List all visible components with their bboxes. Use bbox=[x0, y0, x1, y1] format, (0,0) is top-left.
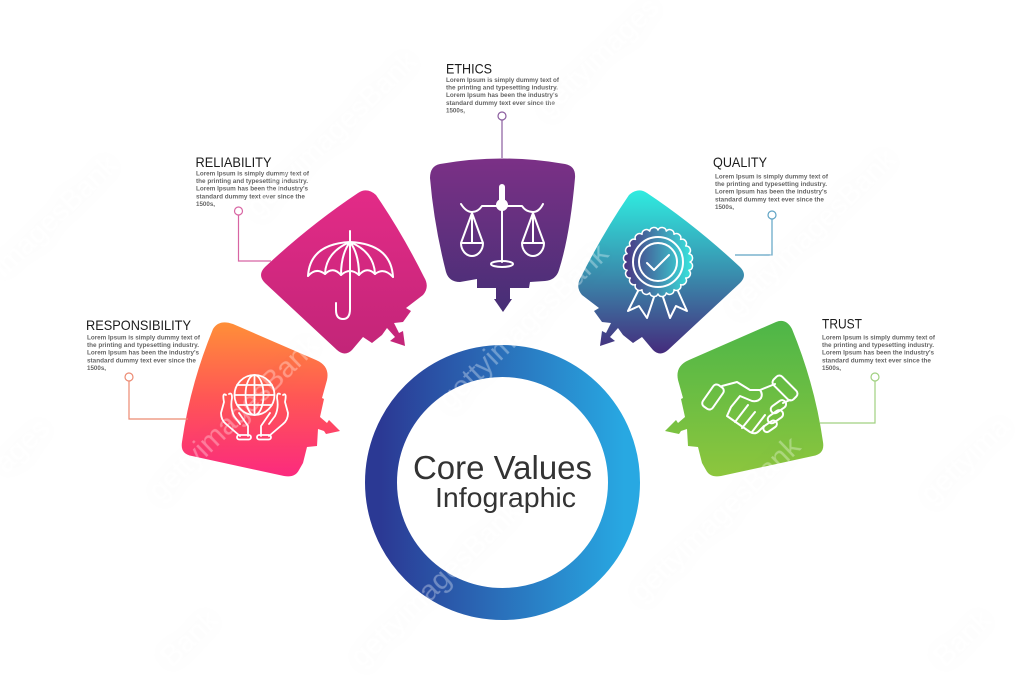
icon: balance scales bbox=[461, 186, 544, 267]
label: reliability: standard dummy text ever since the bbox=[196, 194, 305, 200]
panel: reliability bbox=[261, 190, 427, 354]
watermark text: gettyimagesBank bbox=[625, 430, 807, 608]
label: ethics: 1500s, bbox=[446, 108, 465, 114]
panel: ethics bbox=[430, 158, 575, 312]
label: trust: standard dummy text ever since the bbox=[822, 358, 931, 364]
watermark text: Bank bbox=[928, 604, 998, 673]
label: trust: 1500s, bbox=[822, 365, 841, 372]
label: quality: standard dummy text ever since the bbox=[715, 196, 824, 204]
label: ethics: Lorem Ipsum is simply dummy text of bbox=[446, 77, 560, 84]
reliability shape with arrow bbox=[261, 190, 427, 354]
watermark text: gettyimagesBank bbox=[720, 143, 902, 321]
label: trust: Lorem Ipsum is simply dummy text of bbox=[822, 334, 936, 342]
label: trust: the printing and typesetting industry. bbox=[822, 342, 934, 349]
label: responsibility: 1500s, bbox=[87, 365, 106, 372]
panel: trust bbox=[665, 321, 823, 476]
label: responsibility: the printing and typesetting industry. bbox=[87, 342, 199, 349]
trust shape with arrow bbox=[665, 321, 823, 476]
label: ethics bbox=[446, 60, 560, 114]
label: reliability: RELIABILITY bbox=[196, 154, 272, 170]
watermark text: gettyimagesBank bbox=[433, 237, 615, 415]
watermark text: gettyimagesBank bbox=[241, 45, 423, 223]
icon: hands holding globe bbox=[221, 375, 288, 440]
watermark text: Bank bbox=[155, 604, 225, 673]
connector: trust bbox=[820, 373, 879, 423]
ring title: Core Values bbox=[413, 449, 592, 486]
label: responsibility: Lorem Ipsum is simply dummy text of bbox=[87, 334, 201, 342]
label: quality bbox=[713, 154, 829, 211]
responsibility shape with arrow bbox=[182, 322, 340, 476]
ring title: Infographic bbox=[435, 482, 576, 513]
label: reliability bbox=[196, 154, 310, 208]
label: quality: 1500s, bbox=[715, 204, 734, 211]
panel: quality bbox=[578, 190, 744, 354]
ethics shape with arrow bbox=[430, 158, 575, 312]
watermark text: gettyima bbox=[915, 410, 1016, 510]
label: ethics: Lorem Ipsum has been the industry's bbox=[446, 92, 558, 99]
connector: responsibility bbox=[125, 373, 188, 419]
connector: reliability bbox=[234, 207, 271, 261]
ring title bbox=[413, 449, 592, 513]
icon: umbrella bbox=[308, 231, 393, 319]
label: responsibility: RESPONSIBILITY bbox=[86, 317, 192, 333]
label: reliability: the printing and typesetting industry. bbox=[196, 178, 308, 185]
label: trust: TRUST bbox=[822, 316, 862, 332]
connector: quality bbox=[735, 211, 776, 255]
label: quality: Lorem Ipsum is simply dummy text of bbox=[715, 174, 829, 180]
panel: responsibility bbox=[182, 322, 340, 476]
label: trust bbox=[822, 316, 936, 372]
label: reliability: 1500s, bbox=[196, 201, 215, 208]
connector: ethics bbox=[498, 112, 506, 158]
label: quality: Lorem Ipsum has been the industry's bbox=[715, 188, 827, 196]
icon: handshake bbox=[701, 374, 799, 433]
label: ethics: standard dummy text ever since the bbox=[446, 100, 555, 107]
label: ethics: the printing and typesetting industry. bbox=[446, 84, 558, 92]
watermark text: gettyimagesBank bbox=[143, 329, 325, 507]
label: responsibility: Lorem Ipsum has been the industry's bbox=[87, 350, 199, 356]
label: quality: QUALITY bbox=[713, 154, 768, 170]
label: responsibility: standard dummy text ever since the bbox=[87, 358, 196, 364]
icon: award ribbon badge bbox=[623, 227, 693, 318]
label: responsibility bbox=[86, 317, 201, 372]
label: quality: the printing and typesetting industry. bbox=[715, 181, 827, 188]
watermark text: gettyimagesBank bbox=[345, 495, 527, 673]
label: reliability: Lorem Ipsum is simply dummy text of bbox=[196, 170, 310, 178]
central ring bbox=[381, 361, 624, 604]
quality shape with arrow bbox=[578, 190, 744, 354]
label: trust: Lorem Ipsum has been the industry's bbox=[822, 350, 934, 356]
label: ethics: ETHICS bbox=[446, 60, 492, 76]
label: reliability: Lorem Ipsum has been the industry's bbox=[196, 186, 308, 192]
